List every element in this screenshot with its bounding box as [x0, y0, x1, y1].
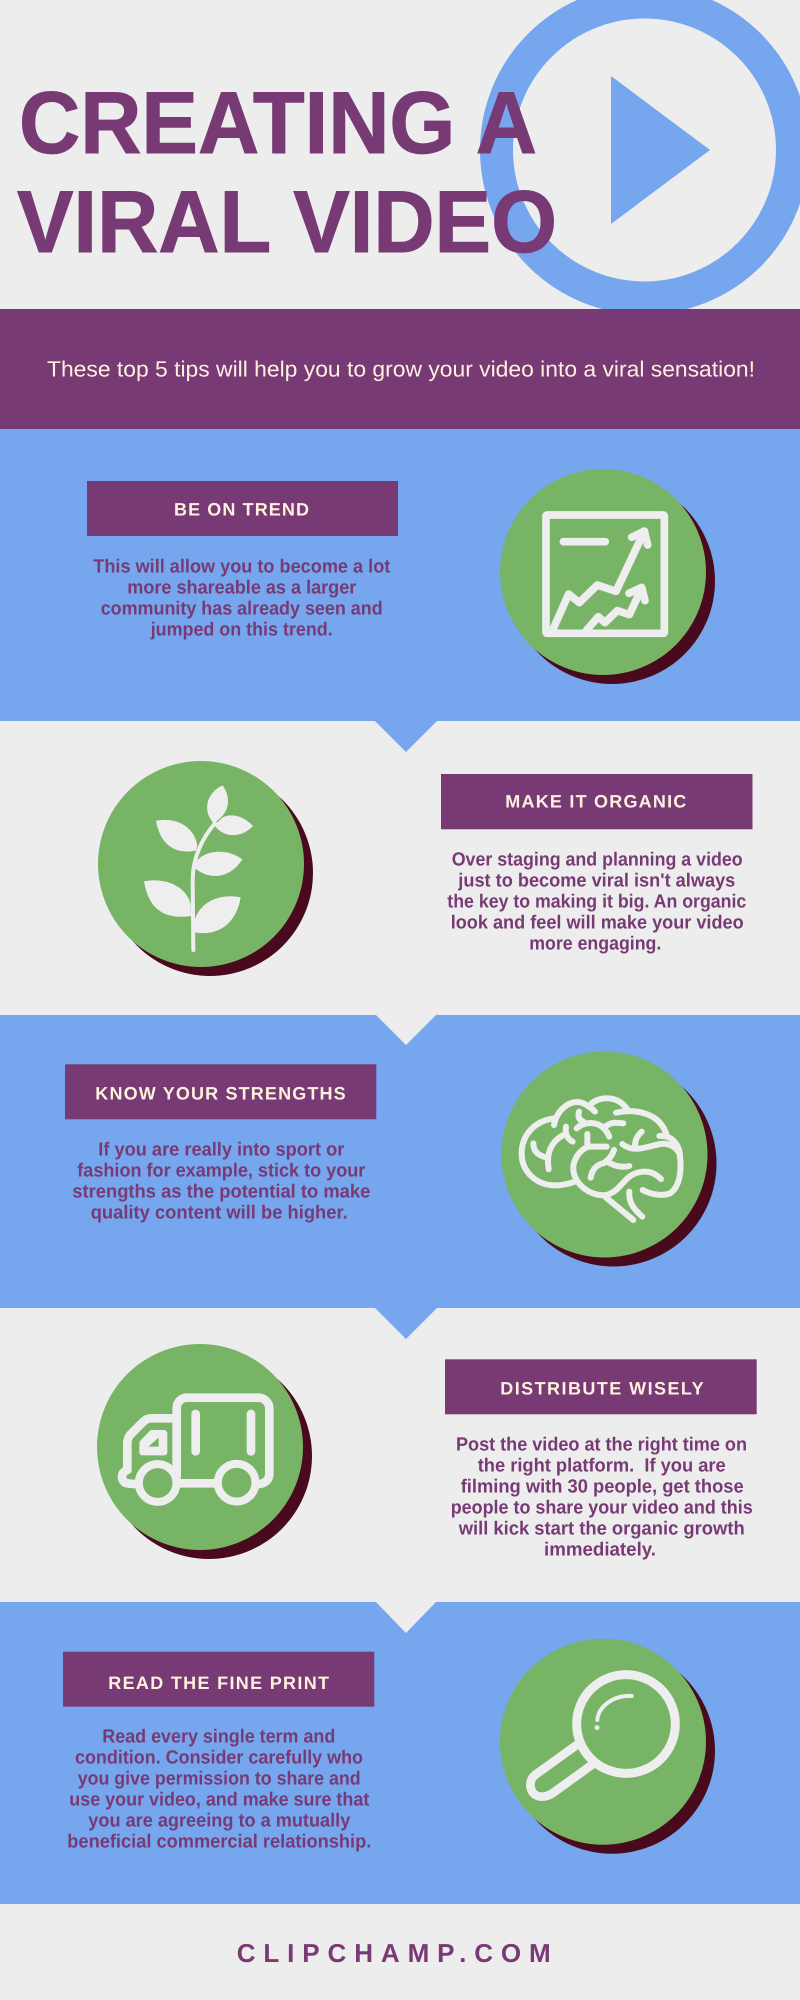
text block — [67, 1727, 371, 1853]
footer text: CLIPCHAMP.COM — [237, 1938, 551, 1968]
icon: magnifying glass — [500, 1639, 715, 1854]
title: VIRAL VIDEO — [17, 172, 557, 271]
notch arrow — [375, 1601, 437, 1633]
text block: filming with 30 people, get those — [461, 1476, 744, 1497]
heading: read the fine print — [63, 1652, 374, 1707]
text block: more shareable as a larger — [127, 578, 357, 599]
icon: trend chart — [500, 469, 715, 684]
text block: Post the video at the right time on — [456, 1434, 747, 1455]
text block: beneficial commercial relationship. — [67, 1832, 371, 1853]
heading: know your strengths — [65, 1064, 376, 1119]
text block: will kick start the organic growth — [458, 1518, 745, 1539]
panel: be on trend — [0, 429, 800, 752]
text block: look and feel will make your video — [451, 912, 744, 933]
panel: distribute wisely — [97, 1308, 757, 1560]
text block: condition. Consider carefully who — [75, 1748, 363, 1769]
icon: plant — [98, 761, 313, 976]
text block: community has already seen and — [101, 599, 383, 620]
text block: you give permission to share and — [78, 1769, 361, 1790]
text block: the key to making it big. An organic — [447, 891, 747, 912]
heading: be on trend — [87, 481, 398, 536]
text block: use your video, and make sure that — [69, 1790, 370, 1811]
text block: immediately. — [544, 1539, 656, 1560]
text block: quality content will be higher. — [91, 1202, 348, 1223]
icon: play button — [496, 2, 792, 298]
text block: Over staging and planning a video — [452, 849, 743, 870]
panel: intro banner — [0, 309, 800, 429]
panel: know your strengths — [0, 1014, 800, 1308]
intro text: These top 5 tips will help you to grow your video into a viral sensation! — [47, 356, 755, 382]
heading: know your strengths: KNOW YOUR STRENGTHS — [95, 1083, 346, 1103]
text block — [93, 557, 391, 641]
icon: delivery truck — [97, 1344, 312, 1559]
text block — [447, 849, 747, 954]
notch arrow — [375, 1014, 437, 1045]
text block: This will allow you to become a lot — [93, 557, 391, 578]
icon: brain — [502, 1052, 716, 1266]
text block: people to share your video and this — [451, 1497, 753, 1518]
text block — [451, 1434, 753, 1560]
text block: just to become viral isn't always — [457, 870, 735, 891]
text block: Read every single term and — [102, 1727, 335, 1748]
title: CREATING A — [19, 73, 537, 172]
heading: make it organic — [441, 774, 752, 829]
text block: fashion for example, stick to your — [77, 1160, 366, 1181]
title — [17, 73, 557, 271]
text block — [72, 1139, 370, 1223]
heading: distribute wisely — [445, 1359, 757, 1414]
notch arrow — [375, 1308, 437, 1339]
panel: make it organic — [98, 761, 752, 976]
heading: make it organic: MAKE IT ORGANIC — [505, 791, 686, 811]
text block: the right platform. If you are — [478, 1455, 726, 1476]
text block: If you are really into sport or — [98, 1139, 345, 1160]
notch arrow — [375, 721, 437, 752]
heading: be on trend: BE ON TREND — [174, 500, 309, 520]
text block: jumped on this trend. — [150, 620, 333, 641]
text block: you are agreeing to a mutually — [88, 1811, 351, 1832]
text block: strengths as the potential to make — [72, 1181, 370, 1202]
heading: distribute wisely: DISTRIBUTE WISELY — [500, 1378, 704, 1398]
panel: read the fine print — [0, 1601, 800, 1904]
heading: read the fine print: READ THE FINE PRINT — [108, 1673, 329, 1693]
text block: more engaging. — [529, 933, 661, 954]
